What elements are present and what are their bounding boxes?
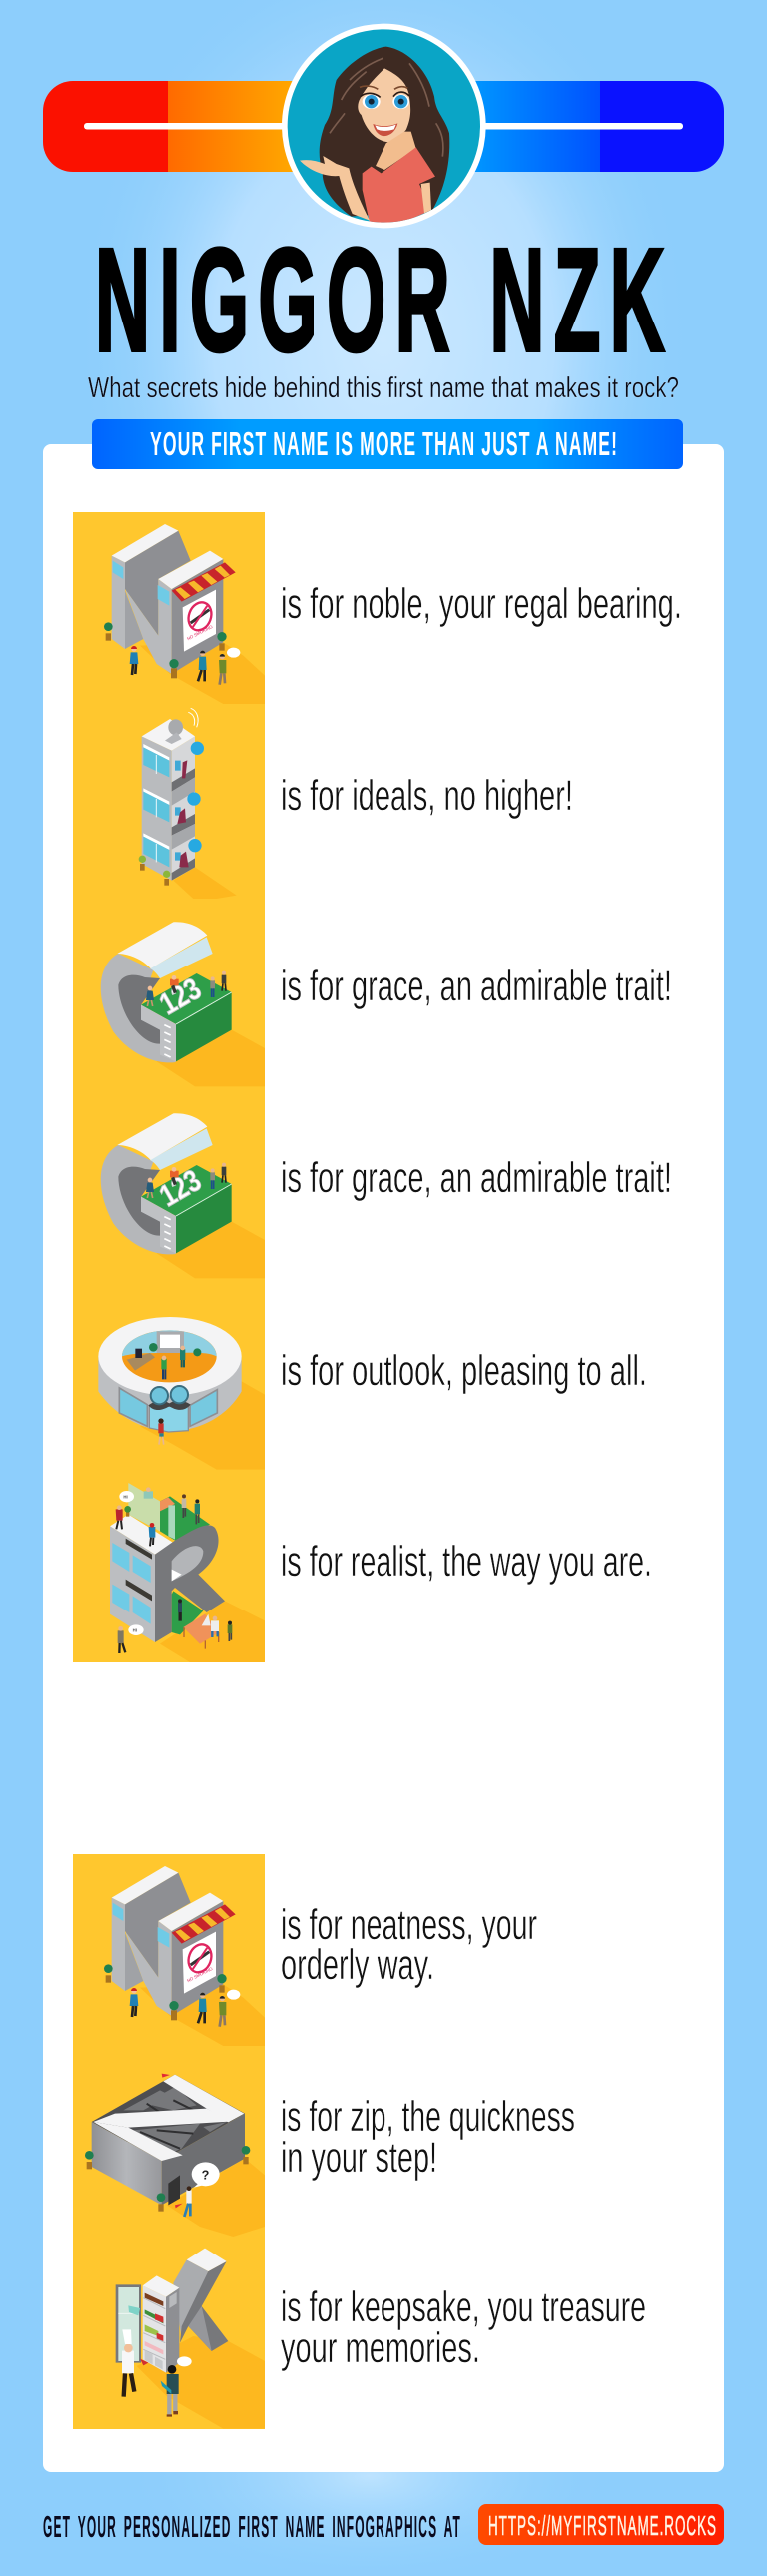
yellow illustration strip 2 [73, 1854, 265, 2429]
illustration: letter I tower [139, 708, 237, 899]
banner [92, 419, 683, 469]
avatar portrait [282, 24, 486, 228]
header colour bar [43, 81, 724, 172]
illustration: letter G building [101, 922, 265, 1086]
illustration: letter G building (repeat) [101, 1113, 265, 1278]
text: is for zip: is for zip, the quickness [281, 2093, 575, 2141]
illustration: letter R building [110, 1483, 265, 1662]
footer url button [478, 2504, 724, 2545]
illustration: letter Z maze building: ? [202, 2169, 209, 2183]
text: is for neatness: orderly way. [281, 1941, 434, 1989]
illustration: letter R building: HI [123, 1494, 128, 1499]
text: is for keepsake: your memories. [281, 2324, 480, 2372]
illustration: letter O building [98, 1317, 265, 1470]
text: is for zip [281, 2093, 575, 2182]
illustration: letter G building (repeat): 123 [154, 1163, 207, 1213]
illustration: letter N building (repeat): NO SMOKING [186, 1966, 214, 1983]
illustration: letter G building: 123 [154, 971, 207, 1021]
illustration: letter Z maze building [85, 2074, 265, 2237]
text: is for neatness: is for neatness, your [281, 1901, 537, 1949]
illustration: letter R building: HI [133, 1628, 137, 1633]
text: is for keepsake [281, 2283, 646, 2372]
illustration: letter K fridge building [116, 2249, 265, 2429]
illustration: letter N building [104, 524, 265, 704]
illustration: letter N building (repeat) [104, 1866, 265, 2046]
text: is for zip: in your step! [281, 2134, 437, 2182]
white content panel [43, 444, 724, 2472]
text: is for ideals: is for ideals, no higher! [281, 772, 573, 820]
illustration: letter N building: NO SMOKING [186, 624, 214, 641]
yellow illustration strip 1 [73, 512, 265, 1662]
text: is for neatness [281, 1901, 537, 1989]
